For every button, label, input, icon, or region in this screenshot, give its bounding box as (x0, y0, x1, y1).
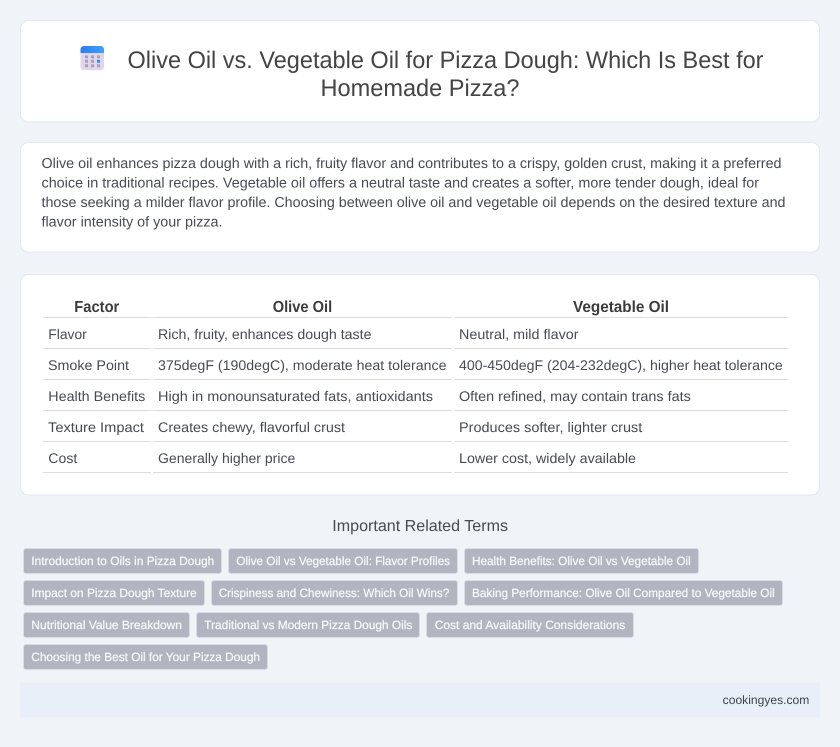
table header row: Factor (74, 299, 119, 316)
chip (24, 548, 222, 574)
footer source text: cookingyes.com (723, 693, 809, 707)
row: texture impact: Produces softer, lighter crust (459, 419, 642, 435)
panel: intro paragraph (20, 142, 820, 252)
row: cost (43, 450, 788, 472)
title: Olive Oil vs. Vegetable Oil for Pizza Dough: Which Is Best for (128, 47, 764, 74)
chip (228, 548, 458, 574)
row: flavor (43, 326, 788, 348)
chip (24, 580, 204, 606)
row: smoke point: Smoke Point (48, 357, 129, 373)
chip: Choosing the Best Oil for Your Pizza Dough (31, 650, 260, 664)
chip (24, 612, 190, 638)
row: health benefits (43, 388, 788, 410)
intro text: choice in traditional recipes. Vegetable oil offers a neutral taste and creates a softer, more tender dough, ideal for (42, 176, 759, 192)
chip (426, 612, 634, 638)
chip: Traditional vs Modern Pizza Dough Oils (204, 618, 412, 632)
table header row: Vegetable Oil (573, 299, 669, 316)
intro text: Olive oil enhances pizza dough with a rich, fruity flavor and contributes to a crispy, golden crust, making it a preferred (42, 156, 782, 172)
icon: calendar (80, 46, 104, 70)
row: health benefits: Health Benefits (48, 388, 145, 404)
chip: Cost and Availability Considerations (435, 618, 625, 632)
table header row: Olive Oil (273, 299, 332, 316)
heading: important related terms: Important Related Terms (332, 518, 508, 535)
intro text (42, 156, 786, 230)
chip: Crispiness and Chewiness: Which Oil Wins? (219, 586, 450, 600)
related term chips (24, 548, 782, 670)
row: flavor: Rich, fruity, enhances dough taste (158, 326, 372, 342)
chip (212, 580, 458, 606)
row: smoke point: 375degF (190degC), moderate heat tolerance (158, 357, 447, 373)
row: texture impact: Texture Impact (48, 419, 144, 435)
row: cost: Cost (48, 450, 77, 466)
row: health benefits: High in monounsaturated fats, antioxidants (158, 388, 433, 404)
panel: comparison table (20, 274, 820, 495)
intro text: those seeking a milder flavor profile. Choosing between olive oil and vegetable oil depends on the desired texture and (42, 195, 786, 211)
chip: Nutritional Value Breakdown (31, 618, 182, 632)
chip: Introduction to Oils in Pizza Dough (31, 554, 214, 568)
chip: Olive Oil vs Vegetable Oil: Flavor Profiles (236, 554, 450, 568)
title: Homemade Pizza? (320, 75, 520, 102)
chip (24, 644, 268, 670)
chip (464, 580, 782, 606)
header panel (20, 20, 820, 122)
row: smoke point (43, 357, 788, 380)
chip (464, 548, 698, 574)
chip: Baking Performance: Olive Oil Compared to Vegetable Oil (472, 586, 775, 600)
intro text: flavor intensity of your pizza. (42, 214, 222, 230)
row: cost: Lower cost, widely available (459, 450, 636, 466)
table header row (43, 299, 788, 318)
row: health benefits: Often refined, may contain trans fats (459, 388, 691, 404)
row: cost: Generally higher price (158, 450, 296, 466)
chip (196, 612, 420, 638)
row: texture impact (43, 419, 788, 442)
row: smoke point: 400-450degF (204-232degC), higher heat tolerance (459, 357, 783, 373)
footer bar (20, 683, 820, 717)
chip: Health Benefits: Olive Oil vs Vegetable Oil (472, 554, 691, 568)
row: flavor: Flavor (48, 326, 87, 342)
title (128, 47, 764, 102)
chip: Impact on Pizza Dough Texture (31, 586, 197, 600)
row: flavor: Neutral, mild flavor (459, 326, 579, 342)
row: texture impact: Creates chewy, flavorful crust (158, 419, 345, 435)
